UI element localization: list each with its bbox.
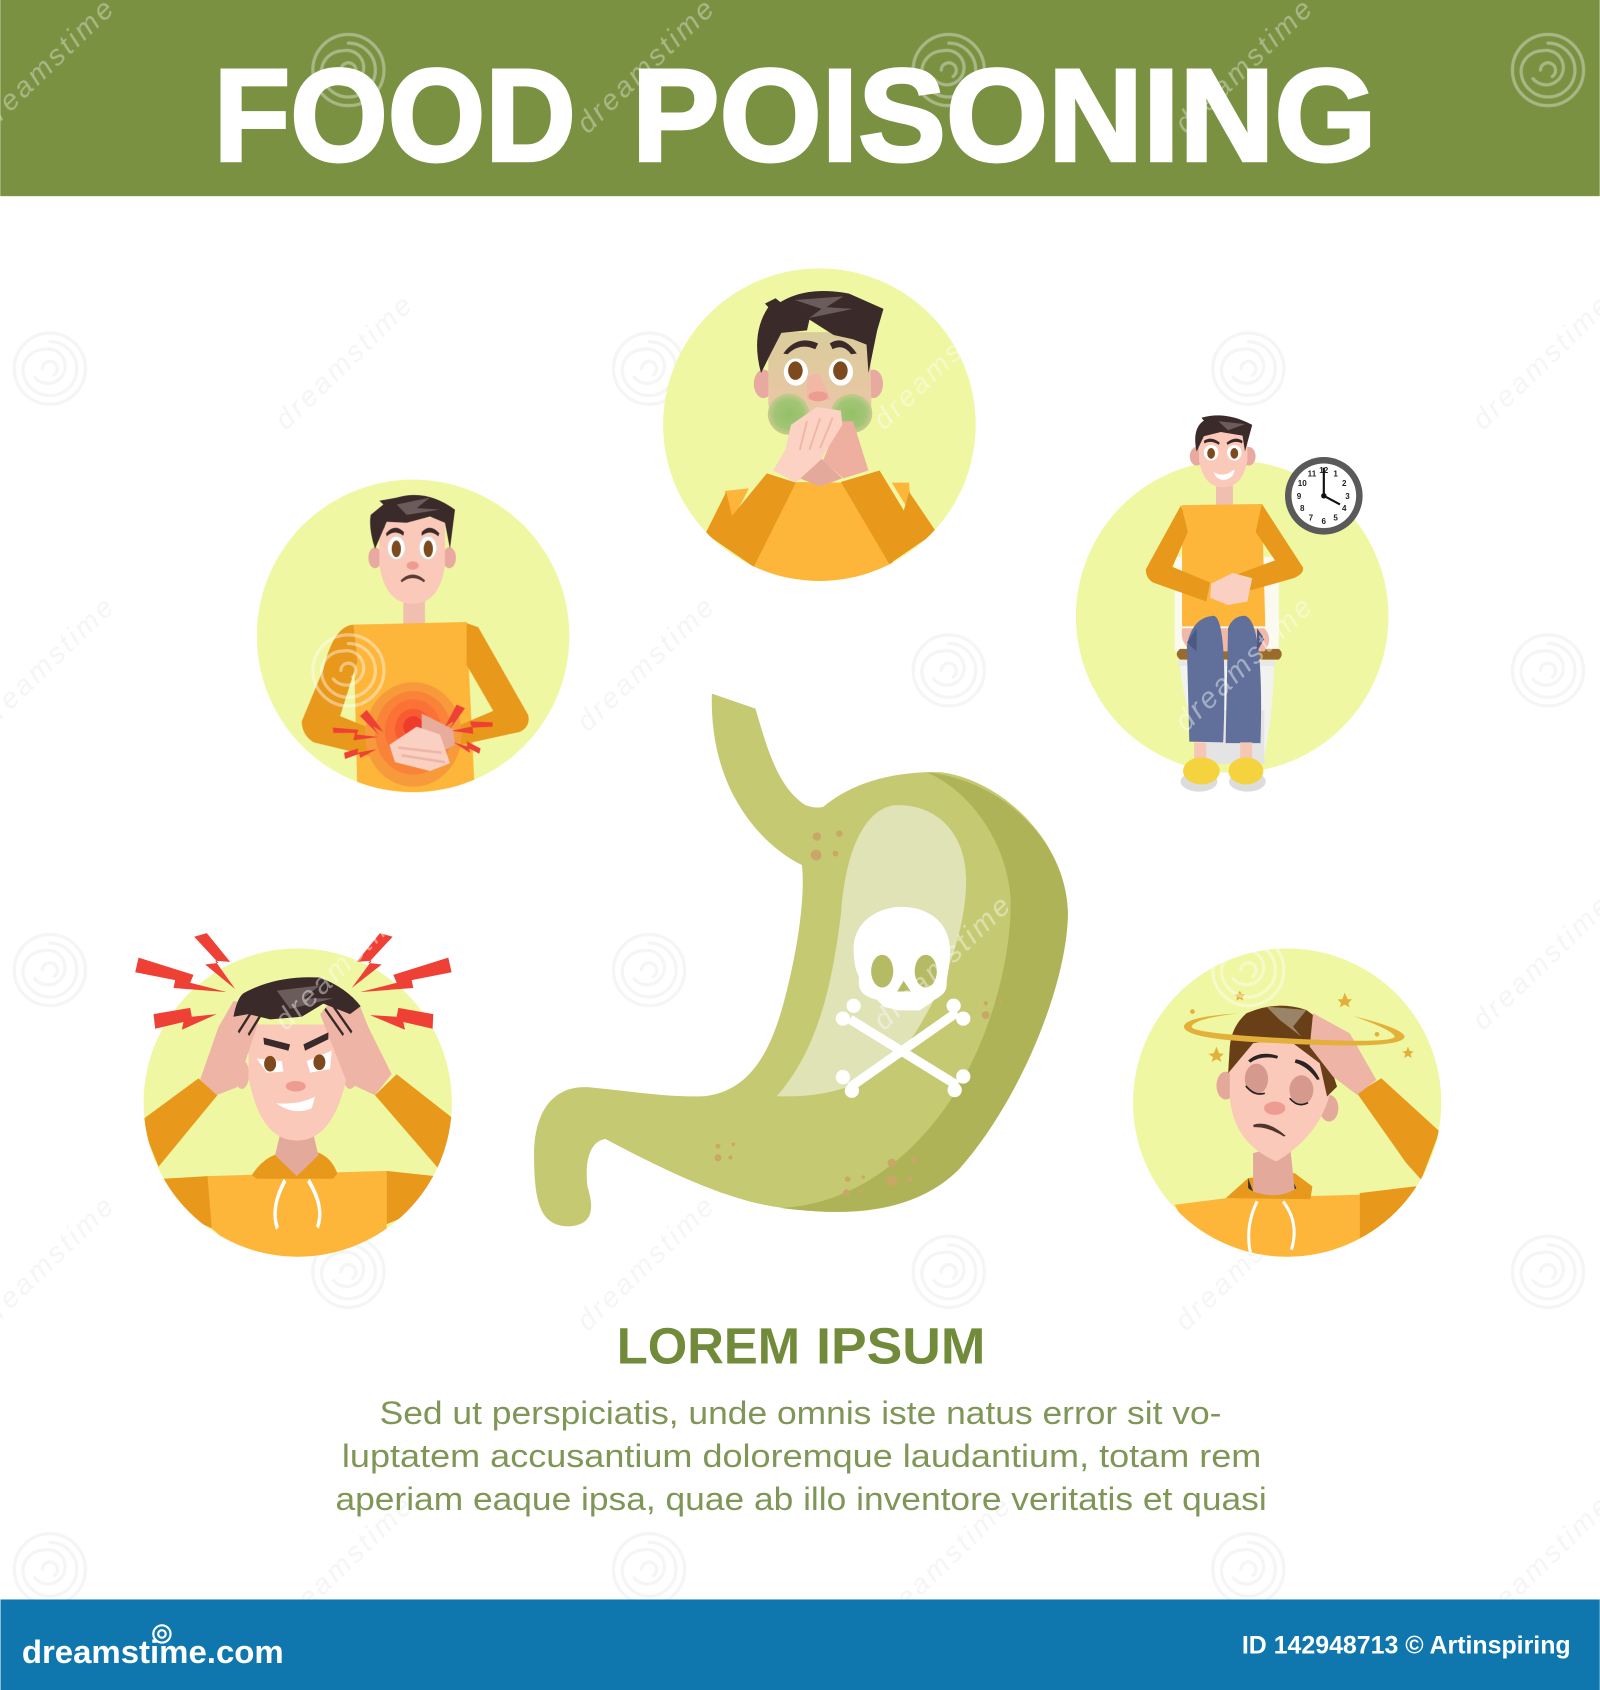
footer logo: dreamstime.com <box>22 1634 284 1670</box>
pain glow <box>365 682 462 787</box>
icon: wall clock: 6 <box>1322 517 1327 526</box>
icon: wall clock: 11 <box>1308 469 1317 478</box>
panel: stomach ache <box>257 480 569 795</box>
icon: wall clock: 10 <box>1298 479 1307 488</box>
icon: skull and crossbones <box>836 907 970 1098</box>
figure: nauseous man <box>705 291 936 589</box>
icon: wall clock: 7 <box>1309 514 1314 523</box>
icon: wall clock: 12 <box>1319 466 1329 475</box>
watermark pattern on page: dreamstime <box>867 1490 1017 1637</box>
text block: description: luptatem accusantium doloremque laudantium, totam rem <box>342 1438 1261 1474</box>
icon: wall clock: 5 <box>1333 514 1338 523</box>
icon: wall clock: 2 <box>1342 479 1347 488</box>
watermark pattern on page: dreamstime <box>570 1191 720 1337</box>
icon: wall clock <box>1285 457 1363 535</box>
figure: man holding head <box>140 977 457 1265</box>
title <box>214 42 1377 189</box>
icon: wall clock: 8 <box>1300 504 1305 513</box>
watermark pattern on page: dreamstime <box>269 1490 419 1637</box>
icon: halo and stars <box>1184 991 1414 1062</box>
watermark overlay on figures: dreamstime <box>269 890 419 1036</box>
icon: red pain bolts <box>135 933 452 1030</box>
watermark overlay on figures: dreamstime <box>867 890 1017 1036</box>
watermark overlay on figures: dreamstime <box>1168 591 1319 738</box>
header banner <box>0 0 1600 196</box>
watermark pattern on page: dreamstime <box>1168 1191 1319 1337</box>
figure: dizzy man <box>1175 1006 1440 1266</box>
panel: dizziness <box>1133 948 1441 1266</box>
text block: description: Sed ut perspiciatis, unde omnis iste natus error sit vo- <box>380 1395 1221 1431</box>
figure: man on toilet <box>1146 415 1303 792</box>
watermark overlay on figures: dreamstime <box>867 290 1017 436</box>
text block: description <box>335 1395 1267 1517</box>
title: FOOD <box>214 42 576 189</box>
heading: lorem ipsum: IPSUM <box>816 1317 985 1374</box>
panel: headache <box>135 933 457 1265</box>
icon: wall clock: 9 <box>1297 492 1302 501</box>
icon: wall clock: 3 <box>1345 492 1350 501</box>
icon: wall clock: 4 <box>1342 504 1347 513</box>
title: POISONING <box>632 42 1377 189</box>
panel: nausea, covering mouth <box>663 268 976 589</box>
footer credit: ID 142948713 © Artinspiring <box>1242 1632 1571 1659</box>
heading: lorem ipsum: LOREM <box>617 1317 800 1374</box>
watermark overlay on figures <box>269 290 1319 1036</box>
footer bar <box>0 1599 1600 1690</box>
heading: lorem ipsum <box>617 1317 985 1374</box>
icon: sores on stomach wall <box>714 830 1002 1196</box>
panel: diarrhea, toilet and clock <box>1076 415 1388 792</box>
watermark pattern on page: dreamstime <box>269 290 419 436</box>
text block: description: aperiam eaque ipsa, quae ab illo inventore veritatis et quasi <box>335 1481 1267 1517</box>
figure: man holding stomach <box>302 495 529 795</box>
watermark pattern on page <box>0 290 1600 1637</box>
illustration: poisoned stomach <box>534 694 1068 1226</box>
icon: wall clock: 1 <box>1333 469 1338 478</box>
watermark pattern on page: dreamstime <box>570 591 720 738</box>
